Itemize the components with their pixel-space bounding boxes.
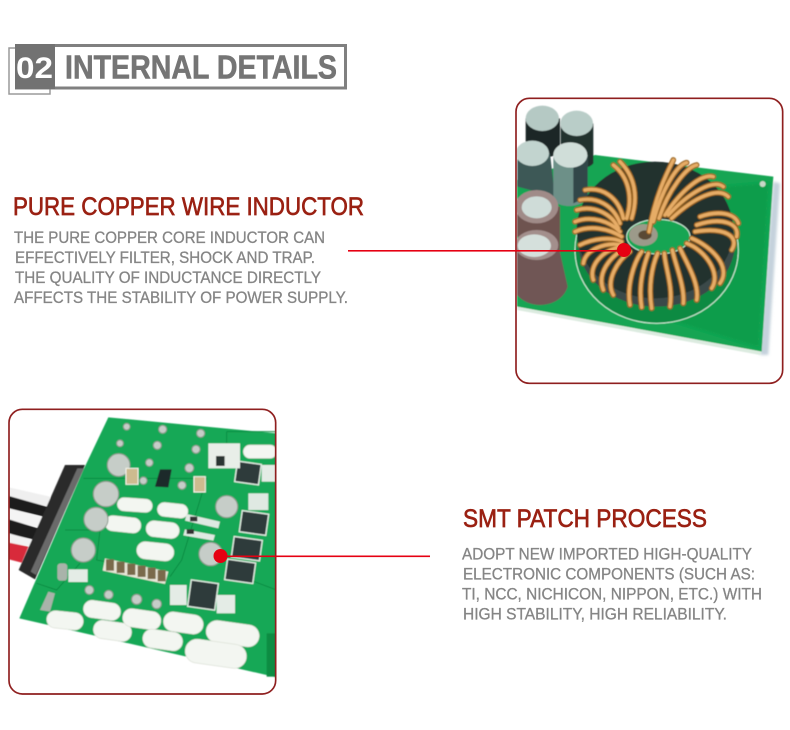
pointer dot	[214, 549, 228, 563]
pointer line	[348, 250, 624, 252]
heading: PURE COPPER WIRE INDUCTOR	[13, 193, 364, 221]
number 02: 02	[16, 52, 53, 85]
title text: INTERNAL DETAILS	[65, 48, 337, 86]
solder joints	[71, 423, 238, 609]
callout: smt pointer	[214, 549, 430, 563]
transistor	[155, 469, 172, 487]
body text	[14, 229, 348, 307]
text block: pure copper wire inductor	[13, 193, 364, 307]
connector	[19, 465, 85, 579]
toroid core	[577, 162, 735, 307]
title frame	[16, 46, 346, 88]
capacitors	[515, 106, 593, 305]
body text: HIGH STABILITY, HIGH RELIABILITY.	[463, 606, 727, 624]
offset outline	[9, 48, 50, 94]
copper traces	[37, 432, 277, 590]
body text: ELECTRONIC COMPONENTS (SUCH AS:	[463, 566, 755, 584]
number block	[15, 44, 55, 89]
body text: ADOPT NEW IMPORTED HIGH-QUALITY	[462, 546, 752, 564]
pointer dot	[617, 243, 631, 257]
board shadow	[760, 182, 780, 355]
text block: smt patch process	[462, 505, 762, 624]
body text	[462, 546, 762, 624]
small components	[40, 443, 277, 613]
callout: inductor pointer	[348, 243, 631, 257]
copper windings	[575, 160, 738, 308]
panel: toroidal inductor photo	[515, 98, 783, 383]
body text: THE QUALITY OF INDUCTANCE DIRECTLY	[15, 269, 321, 287]
body text: THE PURE COPPER CORE INDUCTOR CAN	[14, 229, 325, 247]
body text: AFFECTS THE STABILITY OF POWER SUPPLY.	[14, 289, 348, 307]
body text: EFFECTIVELY FILTER, SHOCK AND TRAP.	[15, 249, 315, 267]
board corner shade	[267, 633, 277, 677]
pointer line	[220, 556, 430, 557]
body text: TI, NCC, NICHICON, NIPPON, ETC.) WITH	[462, 586, 762, 604]
section title: 02 internal details	[9, 44, 346, 94]
capacitor bank	[103, 558, 168, 584]
circuit board	[19, 417, 277, 677]
panel border	[516, 98, 783, 383]
circuit board	[517, 155, 773, 352]
cables	[9, 487, 50, 563]
panel border	[9, 409, 276, 694]
chips	[188, 461, 269, 610]
panel: circuit board photo	[9, 409, 277, 694]
white pads	[46, 445, 277, 670]
heading: SMT PATCH PROCESS	[463, 505, 707, 533]
